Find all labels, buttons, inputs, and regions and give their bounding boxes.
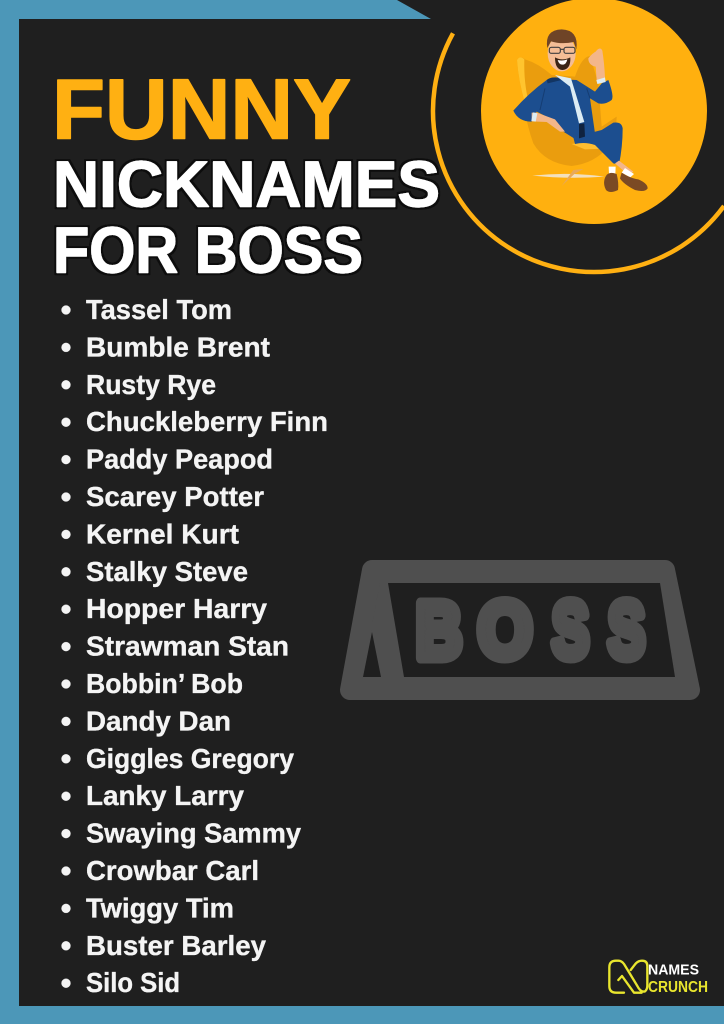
watermark icon: BOSS nameplate: B <box>416 586 462 675</box>
nickname list <box>62 294 328 998</box>
title line: FUNNY: FUNNY <box>52 62 351 158</box>
watermark icon: BOSS nameplate: S <box>608 585 645 674</box>
decorative ring arc <box>433 33 724 272</box>
head <box>547 29 577 71</box>
logo: Names Crunch <box>609 961 708 996</box>
nickname list: Chuckleberry Finn <box>86 406 328 437</box>
logo text: NAMES: NAMES <box>648 962 699 978</box>
nickname list: Silo Sid <box>86 967 180 998</box>
nickname list: Stalky Steve <box>86 556 248 587</box>
illustration: boss sitting in egg chair <box>513 29 648 192</box>
watermark icon: BOSS nameplate: S <box>552 585 589 674</box>
nickname list: Kernel Kurt <box>86 518 239 549</box>
watermark icon: BOSS nameplate: O <box>478 585 532 674</box>
nickname list: Hopper Harry <box>86 593 267 624</box>
nickname list: Dandy Dan <box>86 705 231 736</box>
nickname list: Paddy Peapod <box>86 444 273 475</box>
crossed legs <box>573 122 623 165</box>
chair <box>517 56 617 166</box>
suit jacket with arms <box>513 77 612 140</box>
raised hand <box>588 49 605 80</box>
nickname list: Crowbar Carl <box>86 855 259 886</box>
nickname list: Strawman Stan <box>86 631 289 662</box>
nickname list: Swaying Sammy <box>86 818 301 849</box>
nickname list: Lanky Larry <box>86 780 244 811</box>
chair base <box>532 169 604 186</box>
nickname list: Twiggy Tim <box>86 892 234 923</box>
nickname list: Buster Barley <box>86 930 266 961</box>
lower hand on hip <box>532 113 565 132</box>
title line: FOR BOSS: FOR BOSS <box>53 214 363 286</box>
nickname list: Rusty Rye <box>86 369 216 400</box>
nickname list: Bobbin’ Bob <box>86 668 243 699</box>
logo mark <box>609 961 647 993</box>
title <box>52 62 440 286</box>
watermark icon: BOSS nameplate <box>350 570 690 690</box>
bullets <box>62 306 70 988</box>
nickname list: Giggles Gregory <box>86 743 294 774</box>
title line: NICKNAMES: NICKNAMES <box>53 148 440 220</box>
logo text: CRUNCH: CRUNCH <box>648 979 708 996</box>
raised hand cuff <box>596 77 606 84</box>
ankle <box>615 161 633 175</box>
shirt <box>555 75 584 123</box>
nickname list: Scarey Potter <box>86 481 264 512</box>
yellow circle <box>481 0 707 224</box>
shoes and socks <box>604 167 648 192</box>
lower hand cuff <box>531 112 537 122</box>
nickname list: Tassel Tom <box>86 294 232 325</box>
nickname list: Bumble Brent <box>86 331 270 362</box>
